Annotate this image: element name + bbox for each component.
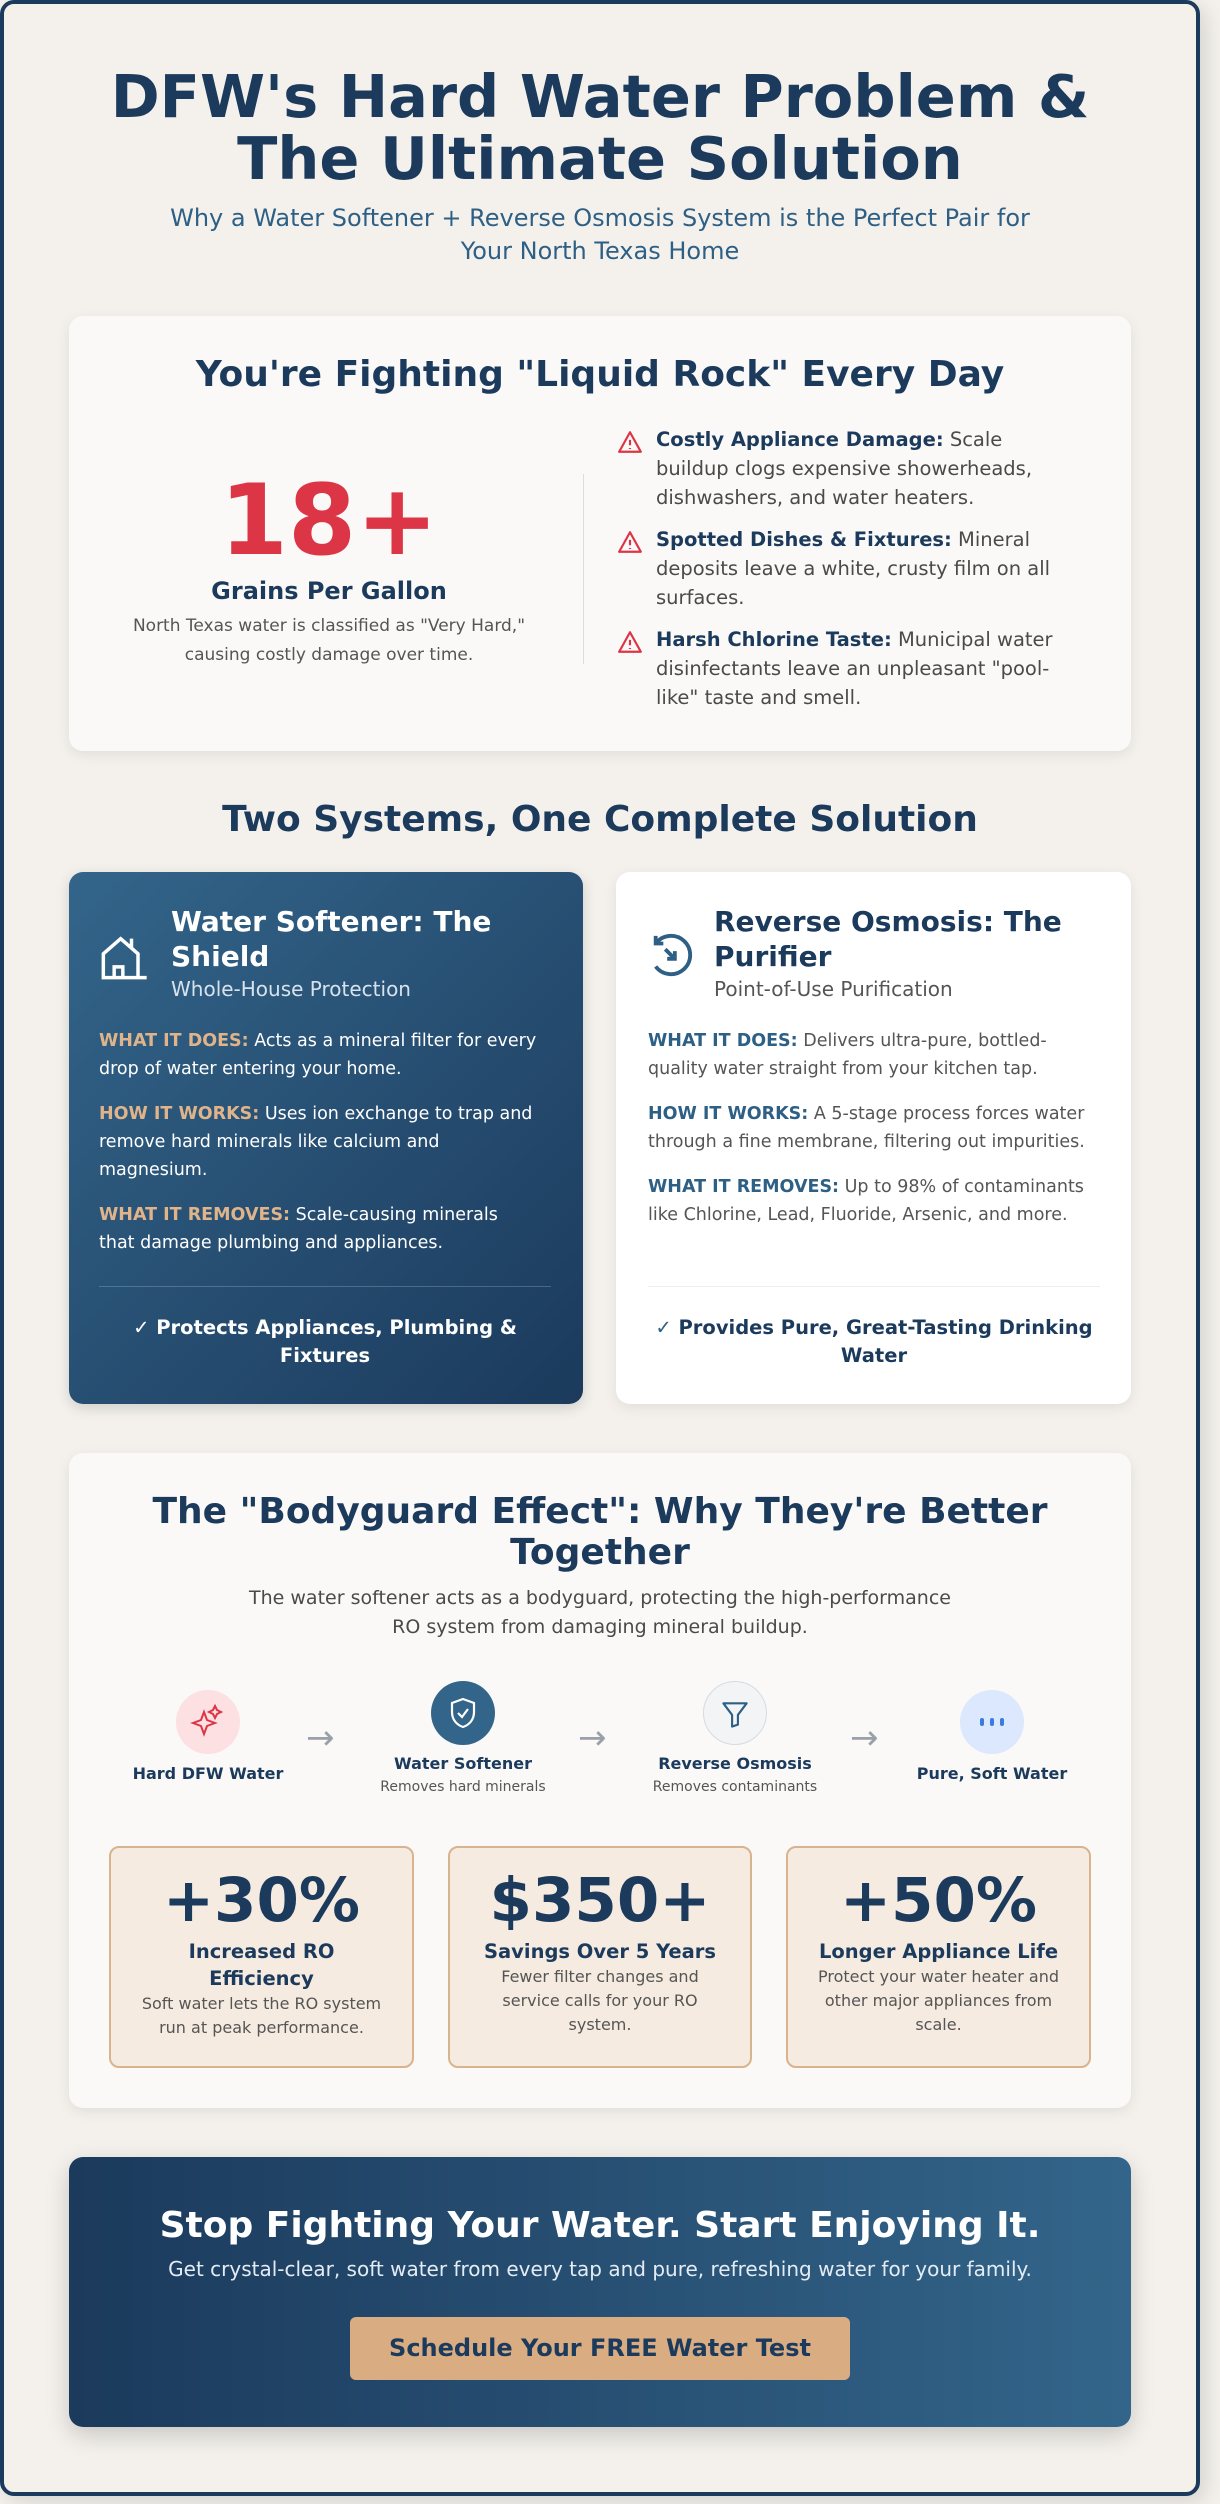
subtitle: Why a Water Softener + Reverse Osmosis System is the Perfect Pair for Your North Texas Home — [170, 204, 1030, 265]
stat: +30% — [109, 1846, 414, 2068]
heading: bodyguard: Together — [510, 1532, 690, 1573]
icon: pure water — [960, 1690, 1024, 1754]
stat: +50%: Protect your water heater and other major appliances from scale. — [818, 1967, 1059, 2034]
heading: liquid rock: You're Fighting "Liquid Rock" Every Day — [196, 354, 1004, 395]
panel: reverse osmosis: Point-of-Use Purification — [714, 977, 953, 1001]
item: appliance damage: Costly Appliance Damage: Scale buildup clogs expensive showerheads, dishwashers, and water heaters. — [656, 428, 1032, 509]
label: softener: Removes hard minerals — [380, 1779, 546, 1795]
stat: 18+: 18+ — [220, 464, 438, 578]
text: bodyguard desc: The water softener acts as a bodyguard, protecting the high-performance — [249, 1587, 951, 1609]
stat: $350+: $350+ — [490, 1865, 710, 1936]
panel: reverse osmosis — [616, 872, 1131, 1404]
stat: +30%: Efficiency — [209, 1967, 314, 1990]
text: softener details — [99, 1031, 536, 1253]
item: spotted dishes: Spotted Dishes & Fixtures: Mineral deposits leave a white, crusty film on all surfaces. — [656, 528, 1050, 609]
label: ro: Removes contaminants — [653, 1779, 817, 1795]
label: ro — [653, 1754, 817, 1795]
panel: water softener — [69, 872, 583, 1404]
heading: bodyguard — [152, 1491, 1048, 1573]
text: ro details: WHAT IT DOES: Delivers ultra-pure, bottled-quality water straight from your kitchen tap. — [648, 1031, 1047, 1079]
icon: warning 1 — [618, 431, 642, 453]
stat: +30%: +30% — [163, 1865, 360, 1936]
icon: ro — [654, 934, 692, 976]
label: softener — [380, 1754, 546, 1795]
icon: house — [102, 936, 147, 980]
stat: 18+: Grains Per Gallon — [211, 577, 447, 605]
icon: softener — [431, 1681, 495, 1745]
text: softener details: HOW IT WORKS: Uses ion exchange to trap and remove hard minerals like calcium and magnesium. — [99, 1104, 532, 1180]
stat: $350+ — [448, 1846, 752, 2068]
icon: hard water — [176, 1690, 240, 1754]
label: pure water: Pure, Soft Water — [917, 1764, 1067, 1783]
heading: two systems: Two Systems, One Complete Solution — [222, 799, 978, 840]
text: softener details: WHAT IT REMOVES: Scale-causing minerals — [99, 1205, 498, 1225]
arrow 2: → — [578, 1718, 606, 1758]
text: ro details — [648, 1031, 1085, 1225]
label: softener: Water Softener — [394, 1754, 532, 1773]
benefit: softener: ✓ Protects Appliances, Plumbing & Fixtures — [133, 1316, 517, 1367]
stat: +30%: Increased RO — [189, 1940, 334, 1963]
cta heading: Stop Fighting Your Water. Start Enjoying It. — [160, 2205, 1040, 2246]
label: hard water: Hard DFW Water — [133, 1764, 283, 1783]
heading: bodyguard: The "Bodyguard Effect": Why They're Better — [152, 1491, 1048, 1532]
button: Schedule Your FREE Water Test — [389, 2334, 811, 2362]
text: softener details: WHAT IT DOES: Acts as a mineral filter for every drop of water entering your home. — [99, 1031, 536, 1079]
title: The Ultimate Solution — [237, 124, 963, 193]
stat: $350+: Savings Over 5 Years — [484, 1940, 716, 1963]
arrow 3: → — [850, 1718, 878, 1758]
stat: +50% — [786, 1846, 1091, 2068]
text: bodyguard desc — [248, 1587, 951, 1638]
icon: warning 3 — [618, 631, 642, 653]
icon: ro filter — [703, 1681, 767, 1745]
panel: bodyguard effect — [69, 1453, 1131, 2108]
text: ro details: WHAT IT REMOVES: Up to 98% of contaminants like Chlorine, Lead, Fluoride, Arsenic, and more. — [648, 1177, 1084, 1225]
title — [111, 62, 1089, 193]
text: ro details: HOW IT WORKS: A 5-stage process forces water through a fine membrane, filtering out impurities. — [648, 1104, 1085, 1152]
panel: water softener: Whole-House Protection — [171, 977, 411, 1001]
panel: liquid rock — [69, 316, 1131, 751]
stat: +50%: Longer Appliance Life — [819, 1940, 1058, 1963]
arrow 1: → — [306, 1718, 334, 1758]
title: DFW's Hard Water Problem & — [111, 62, 1089, 131]
item: chlorine: Harsh Chlorine Taste: Municipal water disinfectants leave an unpleasant "pool-like" taste and smell. — [656, 628, 1053, 709]
stat: +30%: Soft water lets the RO system run at peak performance. — [142, 1994, 381, 2037]
stat: +50%: +50% — [840, 1865, 1037, 1936]
text: bodyguard desc: RO system from damaging mineral buildup. — [392, 1616, 808, 1638]
icon: warning 2 — [618, 531, 642, 553]
stat: 18+: North Texas water is classified as "Very Hard," — [133, 616, 525, 636]
label: ro: Reverse Osmosis — [658, 1754, 812, 1773]
button — [350, 2317, 850, 2380]
stat: 18+: causing costly damage over time. — [185, 645, 473, 665]
cta text: Get crystal-clear, soft water from every tap and pure, refreshing water for your family. — [168, 2257, 1032, 2281]
panel: cta — [69, 2157, 1131, 2427]
benefit: ro: ✓ Provides Pure, Great-Tasting Drinking Water — [655, 1316, 1093, 1367]
title: ro: Reverse Osmosis: The Purifier — [714, 905, 1062, 973]
stat: $350+: Fewer filter changes and service calls for your RO system. — [501, 1967, 699, 2034]
stat: 18+ — [133, 464, 525, 665]
text: softener details: that damage plumbing and appliances. — [99, 1233, 443, 1253]
title: softener: Water Softener: The Shield — [171, 905, 491, 973]
